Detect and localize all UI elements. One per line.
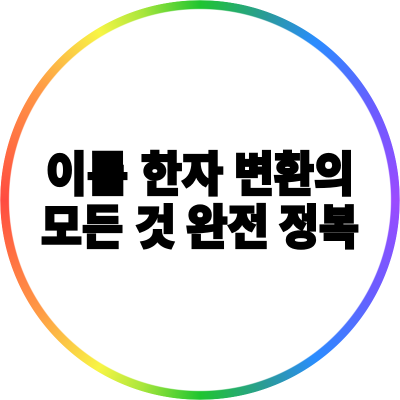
title line 1 word: 이름: 이름: [46, 148, 128, 201]
title line 2 word: 정복: 정복: [279, 201, 359, 254]
title line 2 word: 완전: 완전: [186, 201, 269, 254]
title line 2 word: 것: 것: [135, 201, 176, 254]
title line 1 word: 변환의: 변환의: [234, 148, 354, 201]
title line 2 word: 모든: 모든: [41, 201, 123, 254]
title line 1 word: 한자: 한자: [141, 148, 223, 201]
